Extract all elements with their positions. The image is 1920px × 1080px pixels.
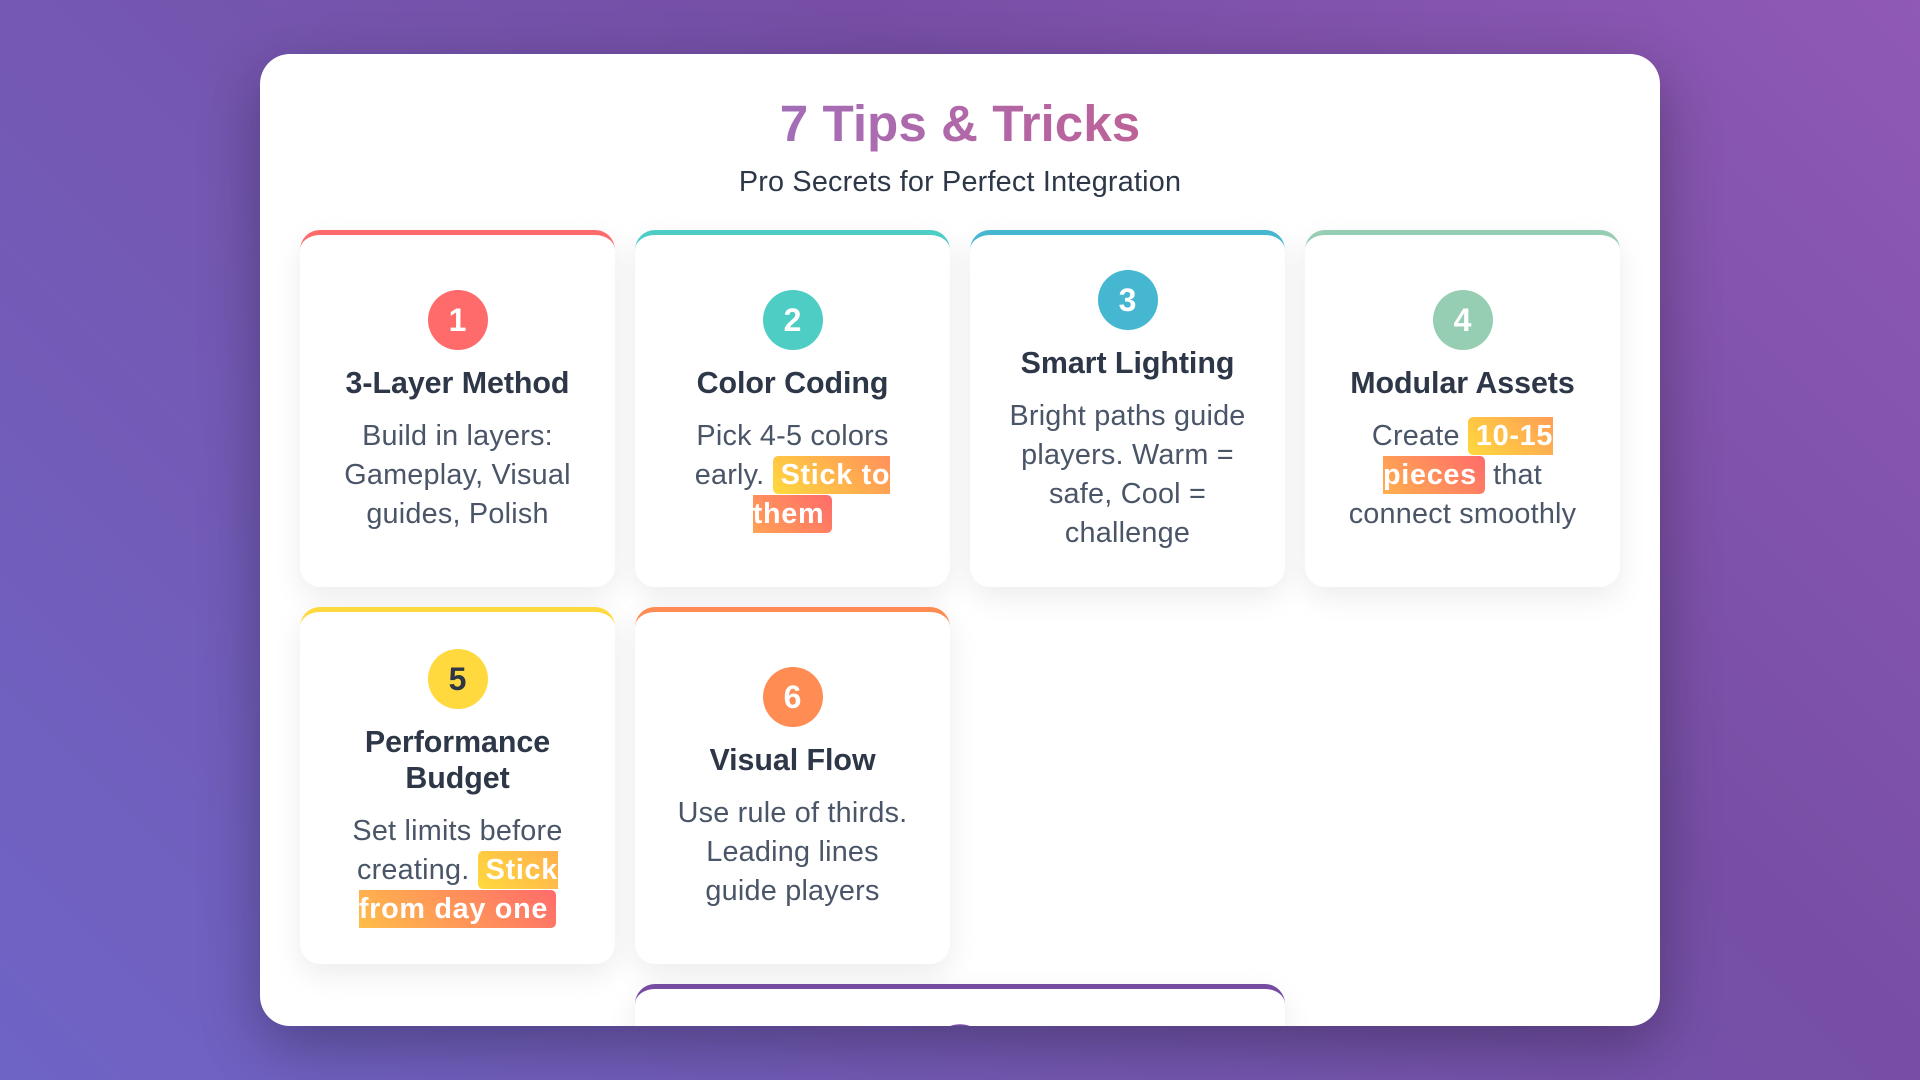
card: tip 1	[300, 230, 615, 587]
card: tip 3	[970, 230, 1285, 587]
icon: number 1	[428, 290, 488, 350]
card: tip 5	[300, 607, 615, 964]
heading: tip 2: Color Coding	[697, 366, 888, 400]
icon: number 5: 5	[449, 660, 466, 696]
icon: number 4	[1432, 290, 1492, 350]
heading: tip 5: Performance Budget	[365, 724, 550, 794]
icon: number 5	[428, 648, 488, 708]
text: tip 3: Bright paths guide players. Warm = safe, Cool = challenge	[1009, 400, 1246, 549]
subtitle: Pro Secrets for Perfect Integration	[739, 166, 1181, 198]
header	[739, 95, 1181, 198]
text: tip 1: Build in layers: Gameplay, Visual guides, Polish	[344, 420, 571, 530]
icon: number 6	[762, 666, 822, 726]
icon: number 3	[1098, 270, 1158, 330]
title: 7 Tips & Tricks	[780, 95, 1140, 152]
icon: number 2: 2	[784, 302, 801, 338]
icon: number 3: 3	[1119, 282, 1136, 318]
icon: number 1: 1	[449, 302, 466, 338]
text: tip 6: Use rule of thirds. Leading lines guide players	[678, 796, 907, 906]
icon: number 4: 4	[1454, 302, 1471, 338]
text: tip 5: Set limits before creating. Stick from day one	[352, 814, 563, 924]
icon: clipped top of number circle	[930, 1024, 990, 1026]
text: tip 2: Pick 4-5 colors early. Stick to them	[695, 420, 890, 530]
card: tip 7 (clipped by panel)	[635, 984, 1285, 1059]
card: tip 4	[1305, 230, 1620, 587]
card: tip 2	[635, 230, 950, 587]
heading: tip 4: Modular Assets	[1350, 366, 1575, 400]
heading: tip 3: Smart Lighting	[1021, 346, 1234, 380]
icon: number 6: 6	[784, 678, 801, 714]
heading: tip 6: Visual Flow	[709, 742, 876, 776]
heading: tip 1: 3-Layer Method	[346, 366, 569, 400]
text: tip 4: Create 10-15 pieces that connect smoothly	[1349, 420, 1576, 530]
icon: number 2	[762, 290, 822, 350]
card: tip 6	[635, 607, 950, 964]
panel: main white card	[260, 54, 1660, 1026]
